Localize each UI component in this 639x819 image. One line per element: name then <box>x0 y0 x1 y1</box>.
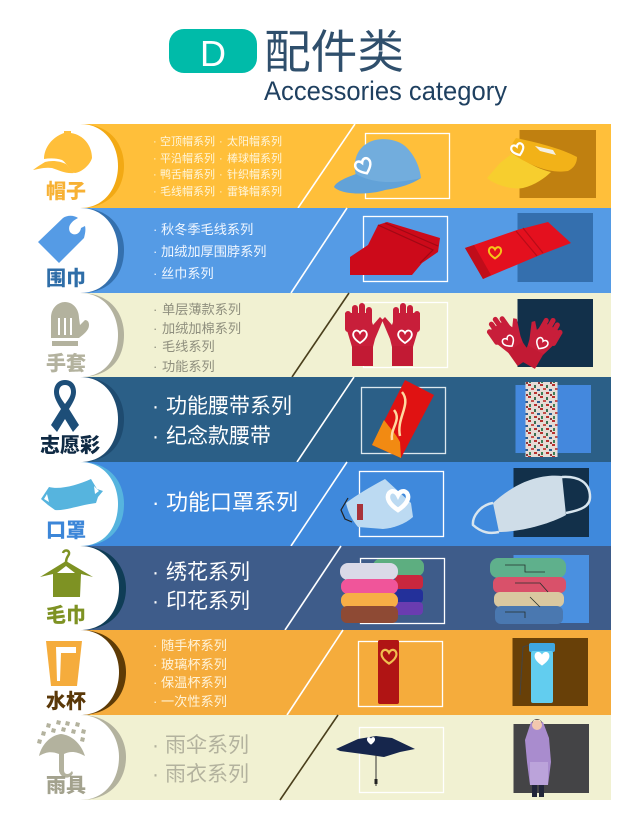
text: towel series list: · <box>152 590 159 613</box>
text: scarf series list: · <box>153 222 157 237</box>
photo frame <box>360 558 444 624</box>
text: hat series list: · <box>153 136 157 148</box>
text: sash series list: 纪念款腰带 <box>166 425 271 448</box>
product: navy umbrella <box>336 736 415 786</box>
heading: 配件类: 配件类 <box>264 16 404 82</box>
text: hat series list: · <box>153 169 157 181</box>
text: hat series list: · <box>219 186 223 198</box>
diagonal divider <box>291 208 347 293</box>
panel: volunteer sashes <box>20 377 611 462</box>
text: cup series list: 保温杯系列 <box>161 675 227 690</box>
label: 口罩: 口罩 <box>46 514 86 543</box>
text: towel series list: 印花系列 <box>166 590 250 613</box>
panel: scarves <box>20 208 611 293</box>
product: red sash <box>372 380 434 458</box>
panel: rain gear <box>20 715 611 800</box>
text: sash series list: · <box>152 395 159 418</box>
text: glove series list: · <box>153 339 157 354</box>
text: scarf series list: 秋冬季毛线系列 <box>161 222 253 237</box>
text: mask series: 功能口罩系列 <box>166 490 298 515</box>
text: sash series list: 功能腰带系列 <box>166 395 292 418</box>
panel: towels <box>20 546 611 630</box>
text: hat series list: · <box>153 153 157 165</box>
photo frame <box>358 642 442 706</box>
label: 手套: 手套 <box>46 347 86 376</box>
photo frame <box>364 302 448 368</box>
text: rain gear series list <box>152 734 249 786</box>
product: blue bottle <box>520 643 555 703</box>
accent square <box>516 385 591 453</box>
product: blue cap <box>334 139 421 194</box>
icon: cup <box>46 641 82 686</box>
diagonal divider <box>297 377 354 462</box>
text: towel series list <box>152 561 250 613</box>
product: red touch gloves <box>483 309 566 372</box>
product: white mask <box>473 476 590 533</box>
icon: towel on hanger <box>40 550 93 597</box>
photo frame <box>362 388 446 454</box>
icon: scarf tag <box>38 216 85 263</box>
text: hat series list: 空顶帽系列 <box>160 134 215 148</box>
panel: hats <box>20 124 611 208</box>
text: glove series list: 功能系列 <box>162 359 215 374</box>
diagonal divider <box>285 546 341 630</box>
panel: gloves <box>20 293 611 377</box>
text: sash series list: · <box>152 425 159 448</box>
product: blue mask with heart <box>341 479 413 529</box>
label: 围巾: 围巾 <box>46 262 86 291</box>
accent square <box>518 213 593 282</box>
text: cup series list: 一次性系列 <box>161 694 227 709</box>
text: cup series list: · <box>153 657 157 672</box>
text: glove series list <box>153 302 241 374</box>
label: 毛巾: 毛巾 <box>46 599 86 628</box>
text: scarf series list: 加绒加厚围脖系列 <box>161 244 266 259</box>
accent square <box>514 724 589 793</box>
accent square <box>512 638 588 706</box>
text: rain gear series list: · <box>152 734 159 757</box>
diagonal divider <box>287 630 343 715</box>
product: red fringed scarf <box>465 222 571 279</box>
text: hat series list: · <box>219 136 223 148</box>
accent square <box>514 555 589 623</box>
text: hat series list: 毛线帽系列 <box>160 184 215 198</box>
title block <box>169 16 507 106</box>
text: hat series list: 针织帽系列 <box>227 167 282 181</box>
diagonal divider <box>298 124 355 208</box>
text: rain gear series list: · <box>152 763 159 786</box>
diagonal divider <box>292 293 349 377</box>
product: red flask <box>378 640 399 704</box>
label: 雨具: 雨具 <box>46 769 86 798</box>
text: cup series list: 随手杯系列 <box>161 638 227 653</box>
text: scarf series list: · <box>153 266 157 281</box>
text: hat series list: 雷锋帽系列 <box>227 184 282 198</box>
text: glove series list: 单层薄款系列 <box>162 302 241 317</box>
text: hat series list <box>153 134 282 198</box>
text: glove series list: · <box>153 302 157 317</box>
photo frame <box>364 216 448 282</box>
text: hat series list: · <box>219 153 223 165</box>
icon: mitten <box>51 302 89 346</box>
panel: cups <box>20 630 611 715</box>
text: scarf series list: 丝巾系列 <box>161 266 214 281</box>
product: red knit scarf <box>350 222 440 275</box>
text: glove series list: · <box>153 359 157 374</box>
text: cup series list: · <box>153 675 157 690</box>
text: mask series: · <box>152 490 159 515</box>
text: hat series list: 棒球帽系列 <box>227 151 282 165</box>
photo frame <box>366 134 450 198</box>
icon: cup highlight <box>56 647 76 681</box>
icon: ribbon <box>51 380 79 432</box>
label: 志愿彩: 志愿彩 <box>40 429 100 458</box>
icon: cap <box>33 131 92 173</box>
product: yellow visor <box>487 138 577 188</box>
photo frame <box>360 728 444 792</box>
icon: face mask <box>41 479 103 510</box>
text: cup series list: 玻璃杯系列 <box>161 657 227 672</box>
photo frame <box>360 472 444 536</box>
product: confetti neck tube <box>526 382 558 457</box>
text: cup series list: · <box>153 638 157 653</box>
diagonal divider <box>291 462 347 546</box>
text: towel series list: · <box>152 561 159 584</box>
text: rain gear series list: 雨衣系列 <box>165 763 249 786</box>
accent square <box>520 130 596 198</box>
text: hat series list: 平沿帽系列 <box>160 151 215 165</box>
text: glove series list: 毛线系列 <box>162 339 215 354</box>
text: towel series list: 绣花系列 <box>166 561 250 584</box>
label: 水杯: 水杯 <box>46 685 86 714</box>
text: sash series list <box>152 395 292 448</box>
product: towel stacks <box>340 559 424 623</box>
product: purple raincoat <box>525 719 551 797</box>
text: glove series list: 加绒加棉系列 <box>162 321 241 336</box>
text: rain gear series list: 雨伞系列 <box>165 734 249 757</box>
subheading: Accessories category: Accessories category <box>264 76 507 106</box>
diagonal divider <box>280 715 338 800</box>
label: 帽子: 帽子 <box>46 175 86 204</box>
badge: D: D <box>200 33 226 74</box>
text: hat series list: 鸭舌帽系列 <box>160 167 215 181</box>
text: hat series list: 太阳帽系列 <box>227 134 282 148</box>
accent square <box>518 299 593 367</box>
text: scarf series list <box>153 222 266 281</box>
text: cup series list <box>153 638 227 709</box>
accent square <box>514 468 589 537</box>
text: glove series list: · <box>153 321 157 336</box>
text: hat series list: · <box>153 186 157 198</box>
product: red gloves <box>345 306 420 366</box>
text: scarf series list: · <box>153 244 157 259</box>
text: cup series list: · <box>153 694 157 709</box>
badge: D <box>169 29 257 74</box>
text: hat series list: · <box>219 169 223 181</box>
icon: umbrella with rain <box>37 720 86 778</box>
product: printed towel stack <box>490 558 566 624</box>
panel: masks <box>20 462 611 546</box>
